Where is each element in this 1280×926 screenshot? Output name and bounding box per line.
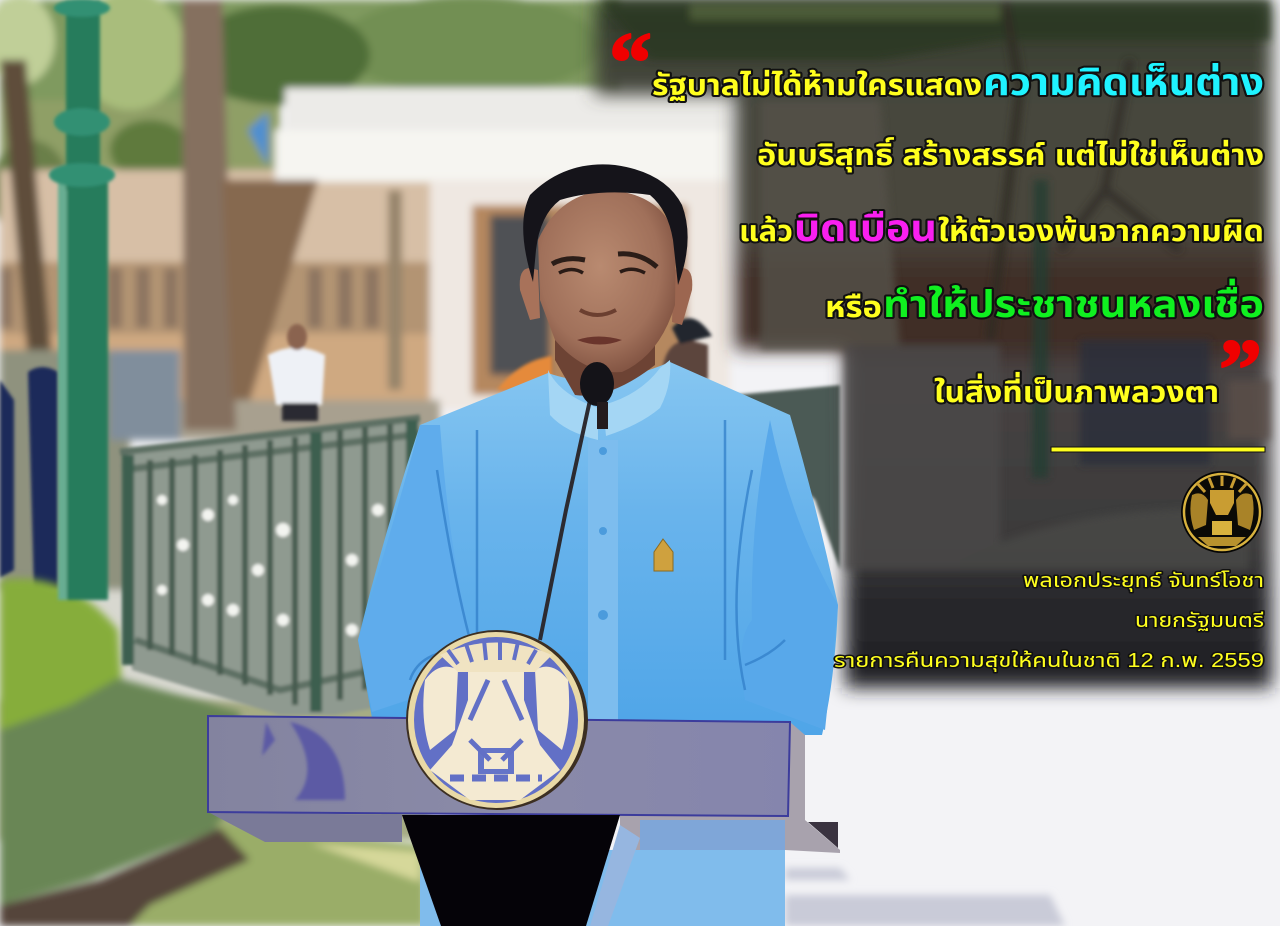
microphone <box>540 400 590 640</box>
metal fence <box>120 385 840 715</box>
face <box>538 190 676 372</box>
man in light-blue suit <box>358 164 838 926</box>
eyebrows <box>552 254 657 267</box>
dark quote panel <box>595 0 1272 688</box>
neck <box>555 320 655 396</box>
quote line 1: ความคิดเห็นต่าง <box>983 62 1264 103</box>
ground and plants <box>0 579 1065 926</box>
attribution: programme and date: รายการคืนความสุขให้คนในชาติ 12 ก.พ. 2559 <box>834 649 1264 672</box>
mouth <box>577 336 622 344</box>
quote line 3: บิดเบือน <box>794 208 937 249</box>
quote line 3: แล้ว <box>739 216 793 248</box>
people in the background <box>0 318 712 590</box>
gold pin <box>654 539 673 571</box>
nose <box>580 310 616 315</box>
opening quote mark: “ <box>609 14 652 110</box>
lamp post <box>49 0 115 600</box>
quote line 4: หรือ <box>825 292 882 324</box>
quote line 4: ทำให้ประชาชนหลงเชื่อ <box>883 278 1264 325</box>
jacket <box>358 362 838 735</box>
quote line 3 <box>739 208 1264 249</box>
attribution: name: พลเอกประยุทธ์ จันทร์โอชา <box>1023 570 1264 592</box>
quote line 3: ให้ตัวเองพ้นจากความผิด <box>938 216 1264 248</box>
collar <box>548 360 670 440</box>
quote line 1 <box>652 62 1264 103</box>
quote line 5: ในสิ่งที่เป็นภาพลวงตา <box>934 371 1219 409</box>
closing quote mark: ” <box>1219 321 1262 417</box>
hair <box>523 164 688 285</box>
emblem on lectern <box>406 630 588 810</box>
eyes <box>559 269 645 273</box>
buttons <box>598 447 608 620</box>
quote line 4 <box>825 278 1264 325</box>
attribution: title: นายกรัฐมนตรี <box>1135 610 1264 632</box>
icon: gold government emblem <box>1181 471 1263 553</box>
ears <box>520 268 540 320</box>
quote line 1: รัฐบาลไม่ได้ห้ามใครแสดง <box>652 70 982 102</box>
lower body <box>420 850 785 926</box>
blurred scenery inside the panel <box>600 0 1270 570</box>
black stand <box>402 815 620 926</box>
lectern <box>208 716 840 926</box>
divider <box>1051 447 1265 452</box>
quote line 2: อันบริสุทธิ์ สร้างสรรค์ แต่ไม่ใช่เห็นต่าง <box>757 137 1264 172</box>
